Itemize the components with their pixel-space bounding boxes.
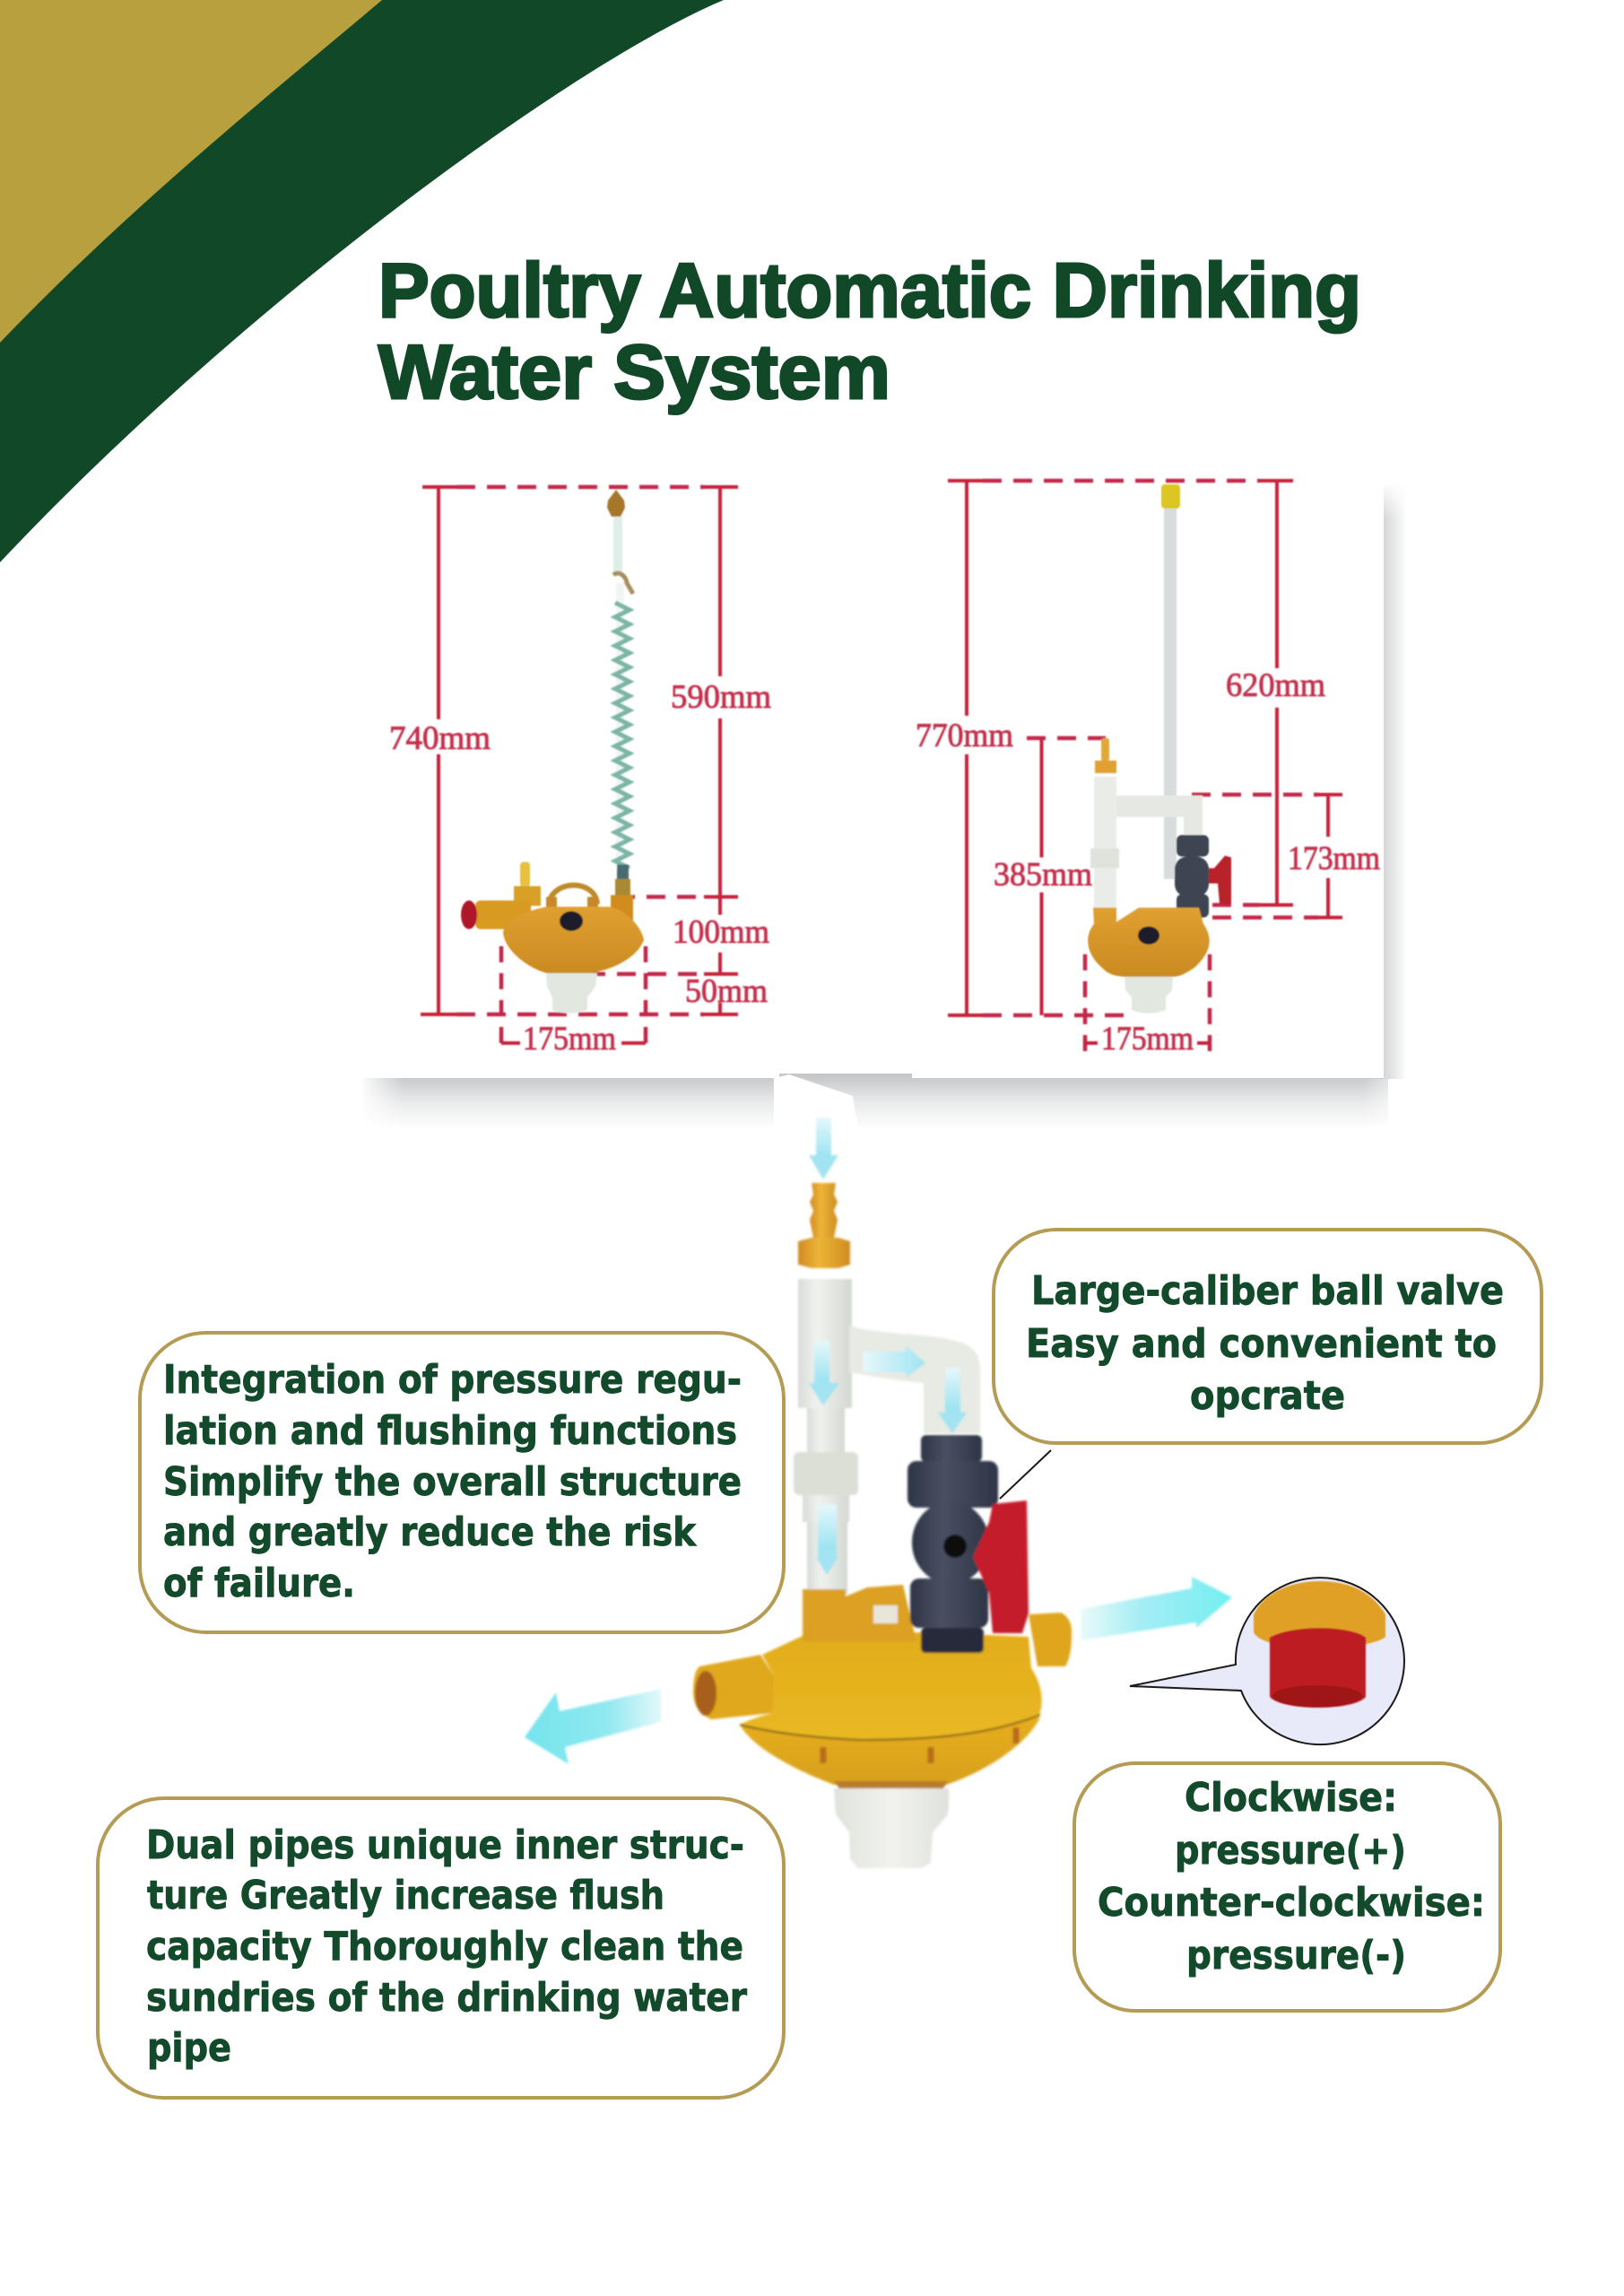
swoosh green xyxy=(0,0,724,562)
tee pipe xyxy=(798,1279,852,1408)
callout: clockwise pressure: pressure(+) xyxy=(1175,1828,1406,1874)
outlet mouth xyxy=(695,1671,716,1716)
bolts xyxy=(823,1727,1016,1763)
arrow: right outlet flow xyxy=(1081,1577,1232,1640)
callout: clockwise pressure xyxy=(1074,1763,1500,2011)
callout: dual pipes: capacity Thoroughly clean the xyxy=(146,1924,743,1970)
callout: ball valve: Easy and convenient to xyxy=(1026,1321,1497,1367)
swoosh gold xyxy=(0,0,382,343)
label: 770mm: 770mm xyxy=(916,718,1013,754)
arrow: inlet flow xyxy=(809,1118,838,1179)
callout: ball valve: opcrate xyxy=(1190,1373,1345,1419)
horizontal pipe and elbow xyxy=(849,1326,980,1433)
arrow: lower pipe flow xyxy=(816,1504,838,1575)
spring coil xyxy=(615,603,630,868)
dimension lines xyxy=(421,487,738,1053)
leader line: ball valve xyxy=(1000,1450,1051,1499)
callout: dual pipes: Dual pipes unique inner struc- xyxy=(146,1822,744,1868)
red adjuster xyxy=(1270,1629,1366,1708)
callout: dual pipes: ture Greatly increase flush xyxy=(147,1873,664,1918)
product: main valve assembly xyxy=(693,1183,1072,1868)
callout: pressure regulation and flushing: of failure. xyxy=(163,1561,355,1606)
label: 590mm: 590mm xyxy=(671,679,771,716)
title: Water System xyxy=(378,330,890,415)
label: 173mm: 173mm xyxy=(1288,840,1380,877)
rim seam xyxy=(740,1715,1040,1740)
callout: dual pipes: pipe xyxy=(147,2025,231,2071)
label: 175mm: 175mm xyxy=(523,1021,616,1057)
callout: pressure regulation and flushing: Integration of pressure regu- xyxy=(163,1357,742,1403)
right outlet xyxy=(1029,1613,1072,1666)
base block xyxy=(803,1585,916,1641)
brown ring xyxy=(834,1781,948,1791)
title xyxy=(378,248,1361,415)
label: 175mm: 175mm xyxy=(1101,1021,1194,1057)
panel shadow xyxy=(359,483,1417,1136)
arrow: left outlet flow xyxy=(525,1689,661,1764)
product: right pressure regulator with ball valve xyxy=(1088,484,1231,1013)
dimension lines xyxy=(948,481,1342,1056)
arrow: elbow horizontal flow xyxy=(863,1345,925,1378)
callout: clockwise pressure: Counter-clockwise: xyxy=(1098,1880,1485,1926)
panel: right dimension diagram xyxy=(916,481,1380,1057)
callout: pressure regulation and flushing: lation and flushing functions xyxy=(163,1408,737,1454)
inlet barb xyxy=(810,1183,838,1238)
callout: pressure regulation and flushing xyxy=(140,1333,784,1632)
callout: ball valve: Large-caliber ball valve xyxy=(1031,1268,1504,1314)
callout: pressure regulation and flushing: and greatly reduce the risk xyxy=(163,1509,698,1555)
callout: pressure regulation and flushing: Simplify the overall structure xyxy=(163,1459,742,1505)
clip window xyxy=(873,1605,898,1623)
label: 100mm: 100mm xyxy=(673,914,769,951)
gold hex cap xyxy=(1254,1581,1385,1648)
label: 385mm: 385mm xyxy=(994,857,1092,893)
callout: ball valve xyxy=(994,1230,1541,1443)
hex nut xyxy=(798,1238,850,1268)
panel: left dimension diagram xyxy=(389,487,771,1057)
label: 50mm: 50mm xyxy=(685,973,768,1010)
arrow: elbow down flow xyxy=(938,1368,967,1433)
lower pipe xyxy=(794,1408,858,1594)
bottom white outlet xyxy=(834,1788,949,1868)
regulator upper shell xyxy=(740,1632,1042,1740)
label: 620mm: 620mm xyxy=(1226,667,1325,704)
title: Poultry Automatic Drinking xyxy=(378,248,1361,334)
product: left pressure regulator xyxy=(461,490,644,1013)
label: 740mm: 740mm xyxy=(389,720,491,757)
inset: pressure adjuster detail xyxy=(1130,1578,1404,1744)
regulator lower dome xyxy=(740,1718,1040,1785)
callout: clockwise pressure: Clockwise: xyxy=(1185,1775,1397,1821)
callout: dual pipes: sundries of the drinking water xyxy=(146,1975,747,2021)
ball valve xyxy=(908,1435,998,1653)
arrow: tee flow xyxy=(809,1341,839,1405)
red handle xyxy=(973,1500,1029,1633)
callout: dual pipes xyxy=(98,1798,784,2098)
callout: clockwise pressure: pressure(-) xyxy=(1186,1933,1406,1979)
left outlet xyxy=(693,1655,775,1719)
